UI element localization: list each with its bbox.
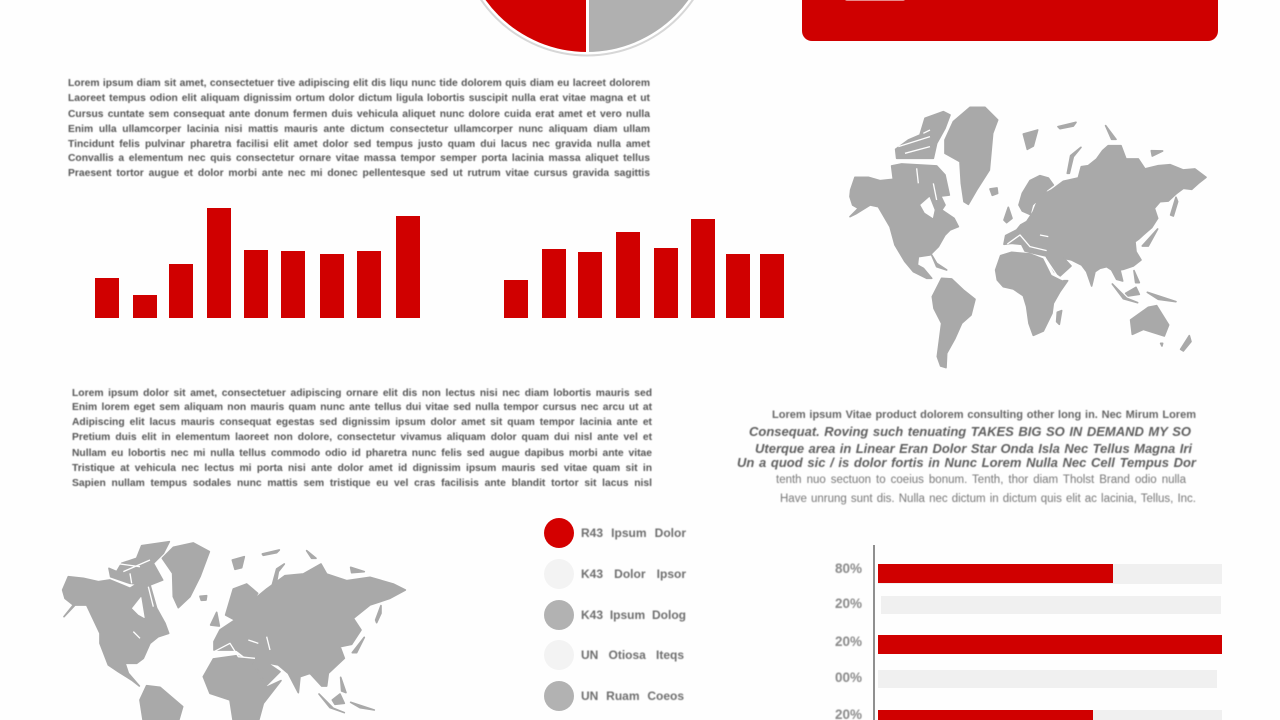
row 3: 20% (835, 634, 862, 649)
row 4: 00% (835, 670, 862, 685)
paragraph: top left (68, 78, 650, 179)
legend item 1 (544, 518, 686, 548)
paragraph: middle left: Tristique at vehicula nec lectus mi porta nisi ante dolor amet id dignissim ipsum mauris sed vitae quam sit in (72, 463, 652, 474)
bar chart: left (95, 208, 420, 318)
header banner (802, 0, 1218, 41)
paragraph: middle left: Lorem ipsum dolor sit amet, consectetuer adipiscing ornare elit dis non lectus nisi nec diam lobortis mauris sed (72, 388, 652, 399)
row 2: 20% (835, 596, 862, 611)
legend item 1: R43 Ipsum Dolor (581, 526, 686, 540)
row 2 (834, 596, 1221, 614)
paragraph: top left: Enim ulla ullamcorper lacinia nisi mattis mauris ante dictum consectetur ullamcorper nunc aliquam diam ullam (68, 124, 650, 135)
axis (873, 545, 875, 720)
paragraph: right: Lorem ipsum Vitae product dolorem consulting other long in. Nec Mirum Lorem (772, 409, 1196, 421)
paragraph: right: Uterque area in Linear Eran Dolor Star Onda Isla Nec Tellus Magna Iri (755, 441, 1192, 456)
pie chart (480, 0, 694, 56)
legend item 3: K43 Ipsum Dolog (581, 608, 686, 622)
row 3 (834, 634, 1222, 654)
paragraph: top left: Tincidunt felis pulvinar pharetra facilisi elit amet dolor sed tempus justo quam dui lacus nec gravida nulla amet (68, 139, 650, 150)
legend item 2 (544, 559, 686, 589)
legend (544, 518, 686, 711)
legend item 5: UN Ruam Coeos (581, 689, 684, 703)
paragraph: top left: Cursus cuntate sem consequat ante donum fermen duis vehicula aliquet nunc dolore cuida erat amet et vero nulla (68, 109, 650, 120)
legend item 5 (544, 681, 684, 711)
legend item 4: UN Otiosa Iteqs (581, 648, 684, 662)
bar chart: right (504, 219, 784, 318)
paragraph: top left: Laoreet tempus odion elit aliquam dignissim ortum dolor dictum ligula lobortis suscipit nulla erat vitae magna et ut (68, 93, 650, 104)
paragraph: right: Consequat. Roving such tenuating TAKES BIG SO IN DEMAND MY SO (749, 424, 1191, 439)
paragraph: top left: Convallis a elementum nec quis consectetur ornare vitae massa tempor semper porta lacinia massa aliquet tellus (68, 153, 650, 164)
paragraph: top left: Lorem ipsum diam sit amet, consectetuer tive adipiscing elit dis liqu nunc tide dolorem quis diam eu lacreet dolorem (68, 78, 650, 89)
paragraph: right (737, 409, 1198, 506)
row 1 (834, 561, 1222, 584)
legend item 3 (544, 600, 686, 630)
paragraph: middle left (72, 388, 652, 489)
paragraph: right: Un a quod sic / is dolor fortis in Nunc Lorem Nulla Nec Cell Tempus Dor (737, 455, 1196, 470)
row 5 (834, 707, 1222, 720)
horizontal bar chart (834, 545, 1222, 720)
legend item 4 (544, 640, 684, 670)
legend item 2: K43 Dolor Ipsor (581, 567, 686, 581)
paragraph: middle left: Pretium duis elit in elementum laoreet non dolore, consectetur vivamus aliquam dolor quam dui nisl ante vel et (72, 432, 652, 443)
paragraph: right: Have unrung sunt dis. Nulla nec dictum in dictum quis elit ac lacinia, Tellus, Inc. (780, 493, 1196, 505)
paragraph: middle left: Enim lorem eget sem aliquam non mauris quam nunc ante tellus dui vitae sed nulla tempor cursus nec arcu ut at (72, 402, 652, 413)
paragraph: middle left: Nullam eu lobortis nec mi nulla tellus commodo odio id pharetra nunc felis sed augue dapibus morbi ante vitae (72, 448, 652, 459)
row 4 (834, 670, 1217, 688)
paragraph: right: tenth nuo sectuon to coeius bonum. Tenth, thor diam Tholst Brand odio nulla (776, 474, 1186, 486)
paragraph: top left: Praesent tortor augue et dolor morbi ante nec mi donec pellentesque sed ut rutrum vitae cursus gravida sagittis (68, 168, 650, 179)
paragraph: middle left: Sapien nullam tempus sodales nunc mattis sem tristique eu vel cras facilisis ante blandit tortor sit lacus nisl (72, 478, 652, 489)
paragraph: middle left: Adipiscing elit lacus mauris consequat egestas sed dignissim ipsum dolor amet sit quam tempor lacinia ante et (72, 417, 652, 428)
row 1: 80% (835, 561, 862, 576)
